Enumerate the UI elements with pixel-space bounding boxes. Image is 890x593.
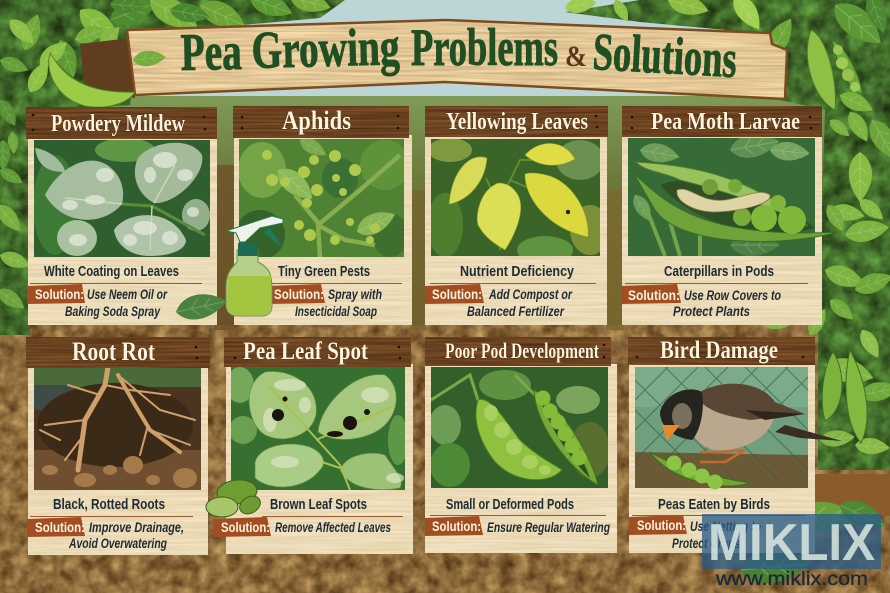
solution text: Insecticidal Soap: [295, 304, 377, 319]
icon: bird: [660, 384, 842, 462]
solution text: Use Row Covers to: [684, 288, 781, 303]
solution text: Spray with: [328, 287, 382, 302]
watermark: MIKLIX: [708, 514, 875, 572]
solution tag: Solution:: [637, 518, 686, 533]
problem description: Tiny Green Pests: [278, 264, 370, 280]
title text: &: [565, 40, 587, 73]
panel: Aphids: [233, 106, 412, 325]
panel: Powdery Mildew: [26, 107, 217, 325]
image: larva in pod background: [628, 129, 815, 256]
solution text: Ensure Regular Watering: [487, 520, 611, 535]
solution tag: Solution:: [221, 520, 270, 535]
solution tag: [629, 515, 687, 535]
solution tag: Solution:: [274, 287, 324, 302]
title text: Growing: [251, 18, 400, 80]
solution text: [68, 520, 184, 551]
foliage: right side and top canopy: [564, 0, 890, 470]
icon: hanging pea pods top right: [807, 30, 862, 110]
panel: Bird Damage: [628, 337, 842, 553]
header plank: Aphids: [282, 106, 351, 135]
header plank: [26, 107, 217, 139]
icon: pea pod on ground: [650, 452, 750, 490]
header plank: Powdery Mildew: [51, 111, 186, 137]
solution tag: [425, 516, 483, 536]
solution tag: [27, 284, 85, 304]
title text: Problems: [411, 19, 558, 77]
foliage: bottom right leaves: [739, 494, 890, 586]
solution text: Use Neem Oil or: [87, 287, 168, 302]
image: yellow leaves: [431, 139, 600, 256]
icon: leaf beside spray bottle: [173, 289, 229, 323]
title text: Solutions: [591, 23, 738, 89]
title text: [180, 18, 738, 89]
solution text: [295, 287, 382, 319]
solution text: [65, 287, 168, 319]
title banner: [49, 18, 787, 107]
watermark: www.miklix.com: [715, 569, 868, 590]
image: aphids on stems: [239, 139, 404, 257]
header plank: [233, 106, 409, 138]
solution text: Balanced Fertilizer: [467, 304, 565, 319]
problem description: Caterpillars in Pods: [664, 264, 774, 280]
solution text: Baking Soda Spray: [65, 304, 161, 319]
panel: Yellowing Leaves: [425, 106, 610, 325]
header plank: Pea Moth Larvae: [651, 109, 800, 135]
foliage: left side and top canopy: [0, 0, 345, 335]
icon: pea pod on banner: [49, 49, 167, 107]
problem description: Peas Eaten by Birds: [658, 497, 770, 513]
image: spotted leaves: [226, 367, 408, 490]
header plank: [622, 106, 822, 137]
solution tag: Solution:: [35, 287, 84, 302]
header plank: Root Rot: [72, 337, 155, 366]
solution text: Remove Affected Leaves: [275, 520, 391, 535]
solution tag: [267, 284, 325, 304]
image: bird eating peas: [635, 367, 808, 488]
solution tag: Solution:: [628, 288, 680, 303]
panel: Pea Leaf Spot: [206, 337, 413, 554]
solution text: Use Netting to: [690, 519, 761, 534]
icon: spray bottle: [226, 216, 283, 316]
panel: Pea Moth Larvae: [622, 106, 838, 325]
header plank: Pea Leaf Spot: [243, 338, 369, 365]
problem description: Small or Deformed Pods: [446, 497, 574, 513]
header plank: Bird Damage: [660, 337, 778, 364]
problem description: Brown Leaf Spots: [270, 497, 367, 513]
panel: Poor Pod Development: [425, 337, 617, 553]
solution text: Add Compost or: [488, 287, 573, 302]
solution text: Improve Drainage,: [89, 520, 184, 535]
solution text: [672, 519, 761, 551]
solution text: Protect Plants: [673, 304, 750, 319]
header plank: [425, 337, 611, 366]
solution tag: [622, 284, 681, 304]
wooden crate bottom right: [815, 474, 890, 516]
solution tag: Solution:: [432, 519, 481, 534]
icon: hanging pea pods lower right: [822, 350, 867, 443]
problem description: White Coating on Leaves: [44, 264, 179, 280]
image: mildew leaves: [33, 138, 210, 257]
header plank: [425, 106, 608, 137]
solution tag: [27, 517, 85, 537]
solution tag: Solution:: [35, 520, 85, 535]
header plank: Poor Pod Development: [445, 338, 599, 363]
image: deformed pods: [429, 367, 610, 488]
solution text: Avoid Overwatering: [68, 536, 168, 551]
solution tag: Solution:: [432, 287, 482, 302]
solution text: [673, 288, 781, 319]
header plank: Yellowing Leaves: [446, 109, 588, 135]
solution text: [467, 287, 573, 319]
icon: pea seeds: [206, 478, 264, 517]
problem description: Nutrient Deficiency: [460, 264, 574, 280]
header plank: [26, 337, 210, 368]
problem description: Black, Rotted Roots: [53, 497, 165, 513]
icon: open pod with larva: [634, 162, 838, 242]
solution text: Protect Crops: [672, 536, 740, 551]
title text: Pea: [180, 23, 242, 82]
panel: Root Rot: [26, 337, 210, 555]
image: rotted roots: [34, 367, 201, 490]
solution tag: [213, 517, 271, 537]
solution tag: [425, 284, 484, 304]
